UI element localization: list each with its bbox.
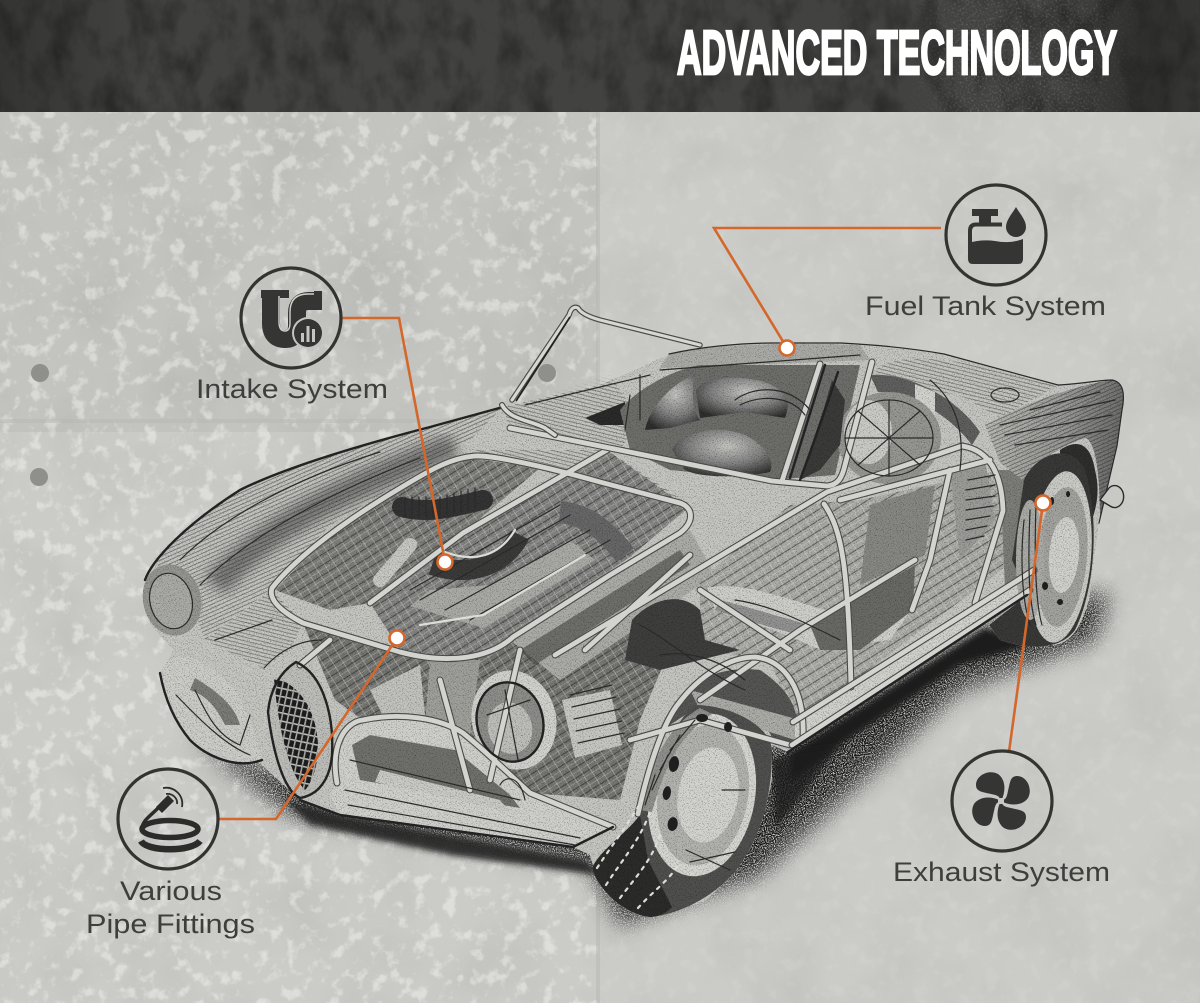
icon: pipe with bar chart [261,290,324,349]
inner frame strip [510,530,715,680]
left bolster [645,375,700,430]
front seat [707,586,915,650]
right engine compartment [370,450,688,660]
callout: various pipe fittings [86,769,255,939]
rear arch dark [1060,444,1098,520]
rear hub area [1000,470,1035,590]
label: intake system: Intake System [196,374,388,404]
callout: various pipe fittings: Pipe Fittings [86,909,255,939]
rear wheel rim [1022,469,1098,645]
behind seat arch [870,375,980,445]
leader: various pipe fittings [219,638,397,819]
hood nose hatch [205,590,303,668]
left headlight [135,558,209,642]
icon: fan [972,772,1030,830]
left bumper [160,656,262,763]
label: fuel tank system: Fuel Tank System [865,291,1106,321]
leader: intake system [342,318,445,562]
corrugated hose [402,500,483,510]
fender hatch [153,407,503,640]
callout: intake system [196,268,388,404]
front bumper [330,716,613,847]
tire tread dark [592,815,672,917]
label: exhaust system: Exhaust System [893,857,1110,887]
windshield frame [502,307,860,435]
radiator support [425,660,480,735]
sill panel [795,570,1034,745]
front rim arch hatch [640,708,712,812]
lower seat cushion [672,430,771,476]
spare wheel [837,392,941,484]
car body tones [135,343,1123,917]
grille shield [268,662,332,798]
front tire tread blocks [597,800,680,908]
rear deck [875,359,1058,418]
front wheel well [660,669,798,745]
valve cover [410,540,595,628]
rear fender panel [985,380,1123,520]
dark steering wheel sector [800,380,845,480]
floor behind fender [700,470,1015,725]
spring [562,690,622,758]
right headlight [461,661,567,779]
icon: fuel tank and drop [968,207,1026,264]
air box pipe [560,512,625,555]
car body base [145,343,1123,917]
cockpit seat area [620,365,860,480]
car outline linework [144,343,1124,908]
label: various pipe fittings: Various [120,876,222,906]
callout: fuel tank system [865,185,1106,321]
cowl panel [503,375,640,450]
marker: exhaust point [1036,496,1050,510]
engine bent pipe [432,535,520,570]
marker: pipe fittings point [390,630,404,646]
rear tire [989,453,1094,647]
illustration: cutaway car [135,307,1124,925]
car ground shadow [190,590,1110,925]
front rim holes [663,714,732,831]
marker: fuel tank point [780,340,794,356]
car frame tubes [271,362,1034,827]
rear rim holes [1042,491,1070,605]
panel: dark concrete header band [0,0,1200,112]
icon: coiled hose [141,788,200,849]
leader: exhaust system [1009,503,1043,752]
fender dark streak [215,447,455,585]
upper seat back [696,378,788,418]
rear brake drum [1016,500,1044,620]
grille mesh [274,678,318,790]
lower front bay [303,600,680,800]
marker: intake point [438,554,452,570]
front wheel rim [636,705,768,885]
front tire [592,705,772,917]
rear floor detail dark [860,485,935,585]
leader: fuel tank system [714,228,941,348]
callout: exhaust system [893,751,1110,887]
dark front floor [625,599,740,670]
bumper opening [352,735,520,808]
left engine compartment [275,457,540,610]
